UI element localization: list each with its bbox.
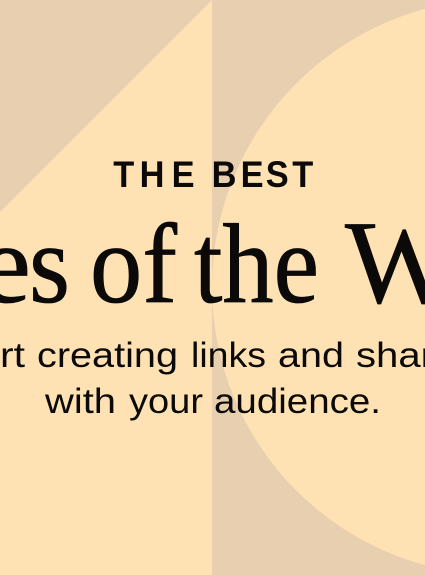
subtitle: shar: [356, 336, 425, 375]
subtitle: links: [191, 336, 266, 375]
main title: [0, 196, 425, 328]
subtitle: [0, 336, 425, 421]
main title: of: [90, 202, 177, 327]
subtitle: and: [278, 336, 344, 375]
shape: top-left triangle: [0, 0, 212, 212]
subtitle: audience.: [214, 382, 381, 421]
eyebrow heading: THEBEST: [113, 154, 313, 195]
subtitle: your: [129, 382, 203, 421]
subtitle: rt: [0, 336, 25, 375]
shape: right half panel: [212, 0, 425, 575]
main title: the: [194, 202, 319, 327]
main title: s: [29, 202, 70, 327]
subtitle: with: [44, 382, 116, 421]
shape: large circle: [212, 0, 425, 575]
subtitle: creating: [37, 336, 178, 375]
